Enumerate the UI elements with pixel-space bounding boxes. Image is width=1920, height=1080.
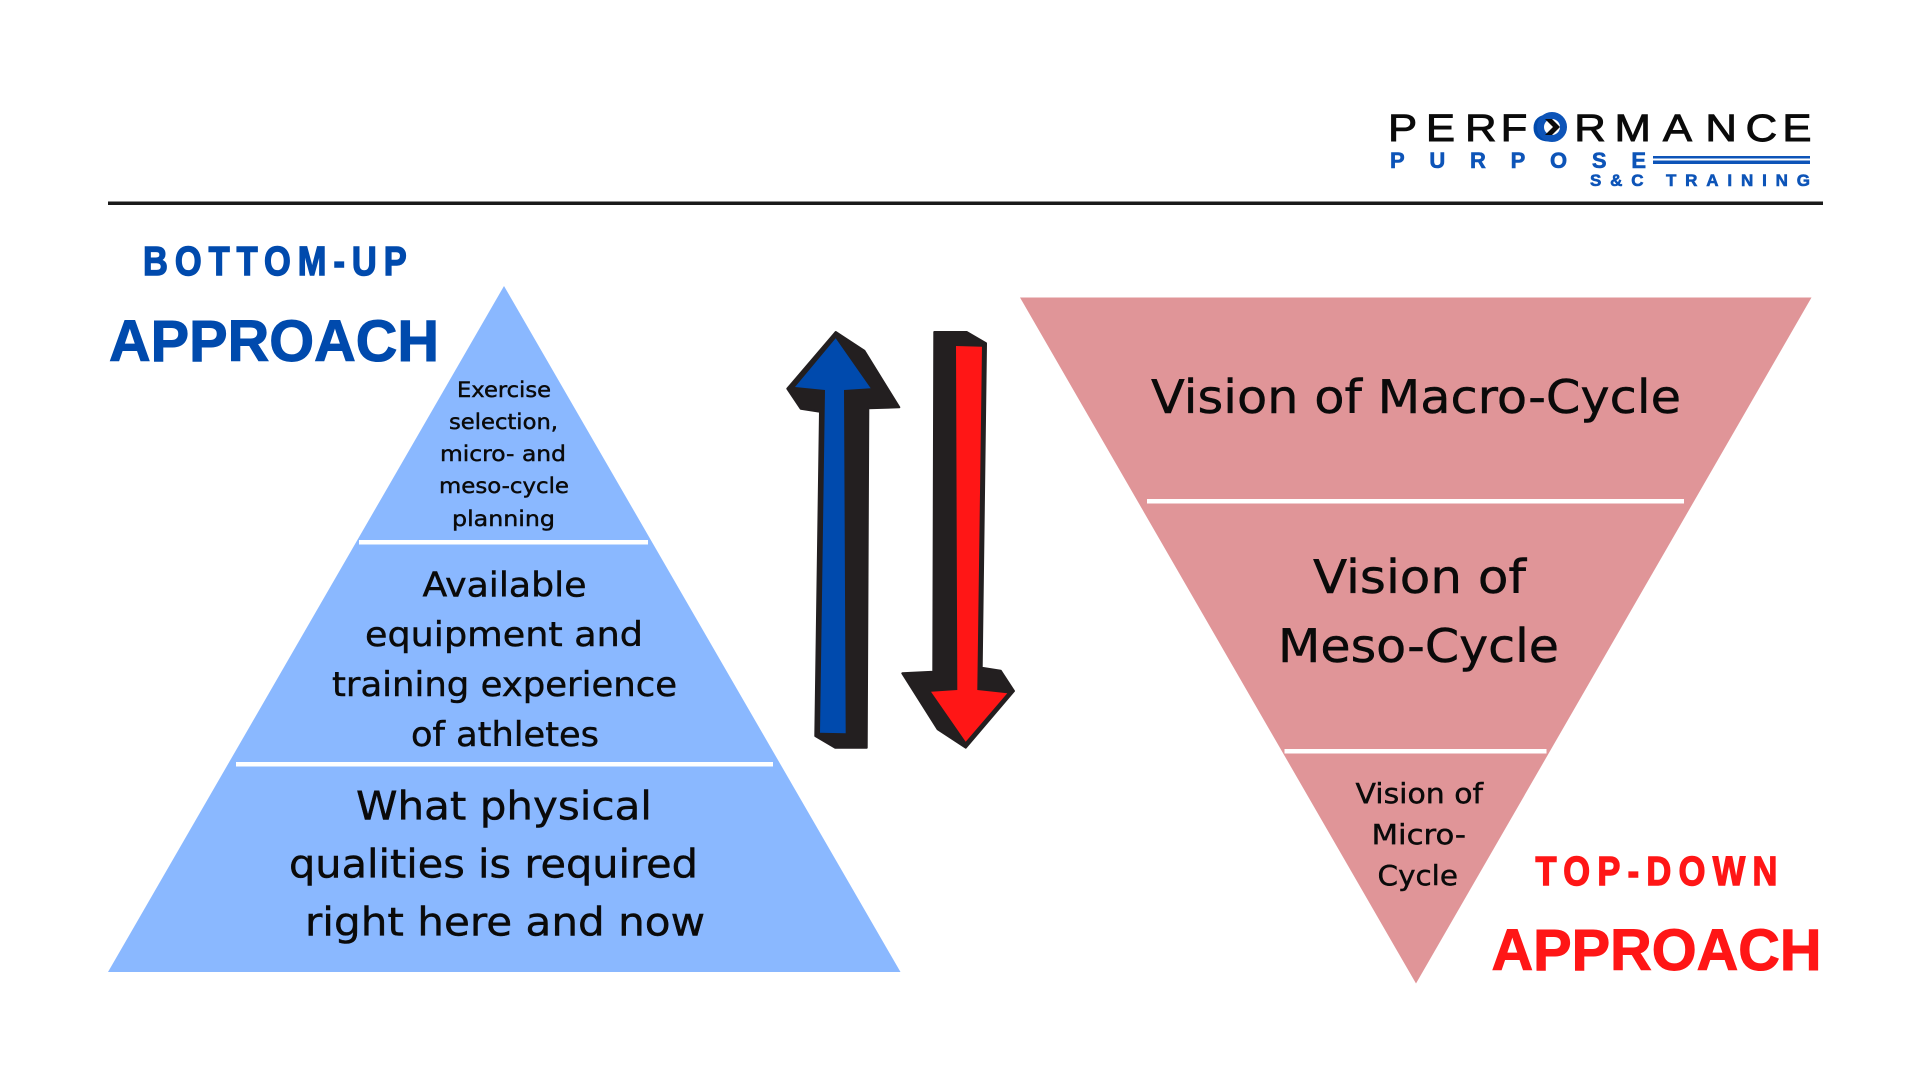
logo: Performance Purpose S&C Training [1388, 107, 1812, 190]
pyramid divider bottom [236, 762, 773, 766]
inverted top tier text: Vision of Macro-Cycle [1151, 370, 1681, 424]
heading: approach (blue): APPROACH [109, 309, 439, 374]
heading: bottom-up: BOTTOM-UP [143, 239, 407, 285]
pyramid bottom tier text: qualities is required [289, 842, 698, 888]
pyramid bottom tier text: right here and now [305, 900, 705, 946]
inverted bottom tier text: Vision of [1356, 777, 1484, 810]
header divider [108, 202, 1823, 205]
inverted bottom tier text: Micro- [1372, 818, 1466, 851]
inverted triangle [1020, 298, 1812, 984]
logo third line: S&C TRAINING [1590, 171, 1810, 190]
pyramid divider top [359, 540, 648, 544]
inverted middle tier text: Vision of [1313, 550, 1528, 604]
pyramid middle tier text: Available [422, 566, 586, 606]
pyramid triangle [108, 286, 900, 972]
heading: approach (red): APPROACH [1492, 918, 1822, 983]
arrow: up [787, 332, 899, 748]
pyramid middle tier text: training experience [332, 665, 677, 705]
panel: top-down inverted pyramid [1020, 298, 1812, 984]
pyramid middle tier text [332, 566, 677, 755]
logo emblem [1540, 116, 1564, 138]
logo double rule [1653, 156, 1810, 164]
inverted divider top [1147, 499, 1684, 504]
inverted middle tier text: Meso-Cycle [1278, 619, 1559, 673]
pyramid bottom tier text: What physical [356, 784, 652, 830]
inverted bottom tier text [1356, 777, 1484, 892]
pyramid middle tier text: equipment and [365, 615, 643, 655]
pyramid top tier text: meso-cycle [439, 474, 569, 498]
arrow: down [902, 332, 1014, 748]
logo wordmark: PERFORMANCE [1388, 107, 1812, 149]
panel: bottom-up pyramid [108, 286, 900, 972]
inverted divider bottom [1284, 749, 1546, 754]
pyramid top tier text: micro- and [440, 442, 566, 466]
pyramid top tier text [439, 378, 569, 531]
heading: top-down: TOP-DOWN [1536, 849, 1777, 895]
pyramid middle tier text: of athletes [411, 715, 599, 755]
pyramid top tier text: planning [452, 507, 555, 531]
logo second line: PURPOSE [1390, 148, 1646, 173]
pyramid bottom tier text [289, 784, 705, 946]
pyramid top tier text: selection, [449, 410, 558, 434]
inverted middle tier text [1278, 550, 1559, 673]
inverted bottom tier text: Cycle [1378, 859, 1458, 892]
pyramid top tier text: Exercise [457, 378, 551, 402]
